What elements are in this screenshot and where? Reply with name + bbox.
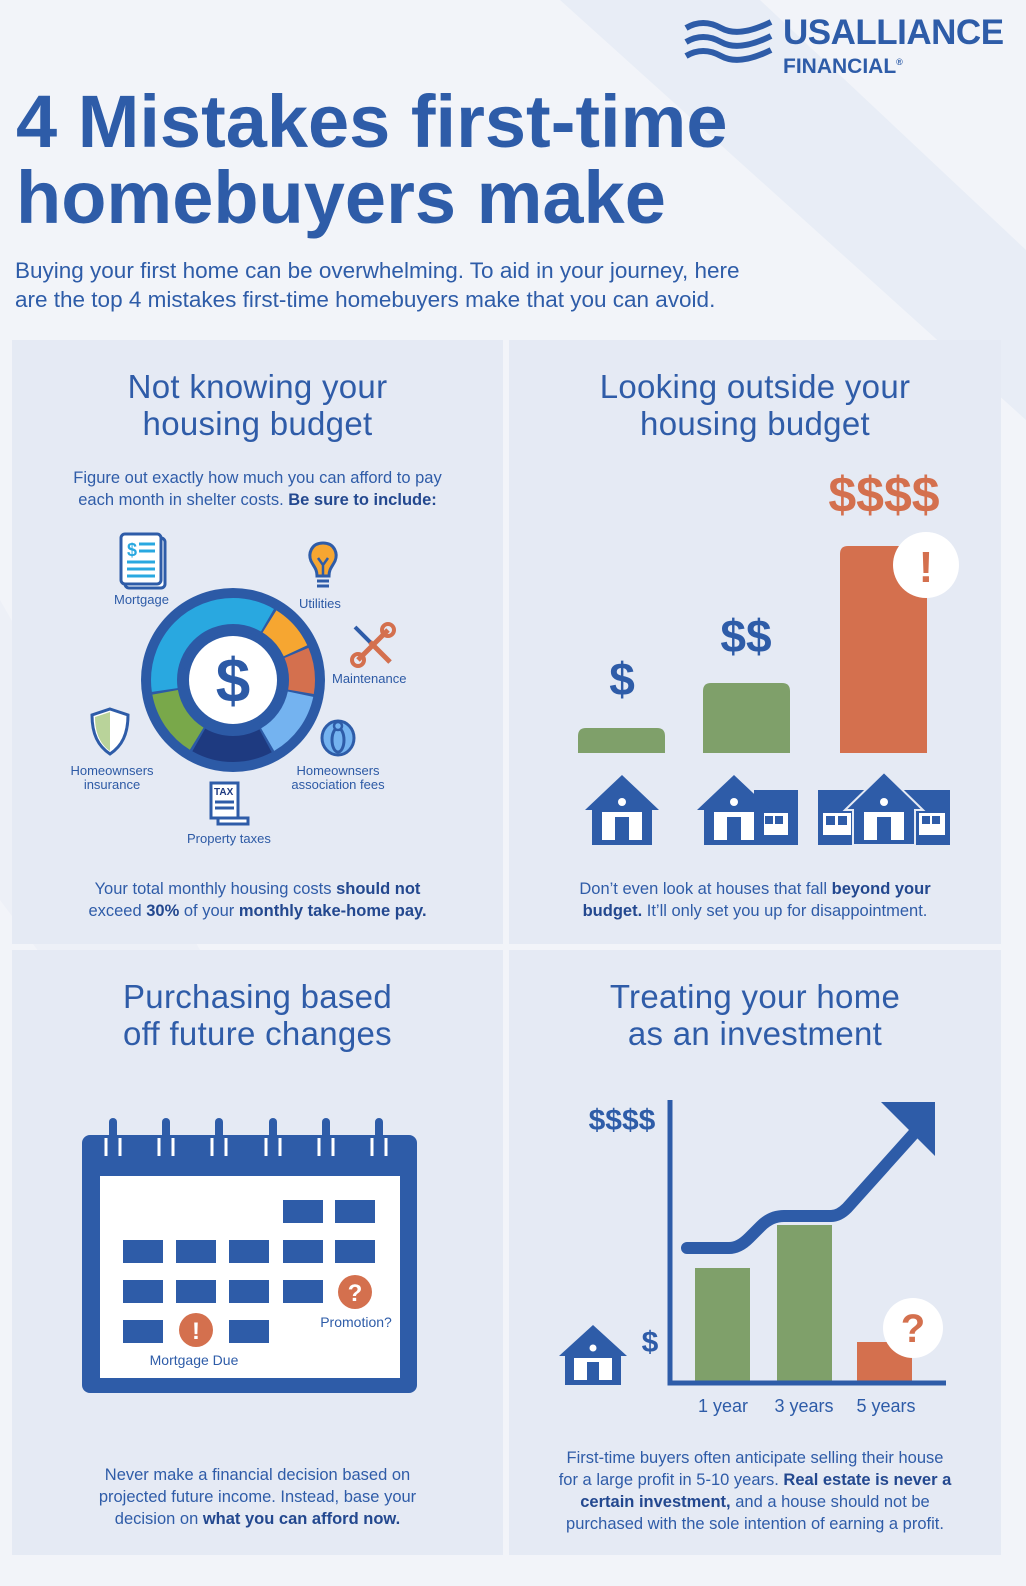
panel: housing budget [12,340,503,944]
panel: housing budget: Utilities [299,596,341,611]
logo: FINANCIAL® [783,55,903,78]
icon: mortgage: $ [127,540,137,560]
icon: house [559,1325,627,1385]
houses [585,772,950,845]
panel: housing budget: insurance [84,777,140,792]
heading 3: Purchasing based [123,978,392,1015]
intro 1: Figure out exactly how much you can afford to pay [73,469,442,487]
icon: HOA [320,720,356,756]
panel: housing budget: Homeownsers [296,763,380,778]
heading 1: housing budget [143,405,372,442]
bar chart: prices: $$ [720,610,772,662]
footer 4: certain investment, and a house should not be [580,1493,930,1511]
growth chart: 5 years [856,1396,916,1416]
icon: question: ? [901,1307,925,1351]
heading 3: off future changes [123,1015,392,1052]
footer 3 [99,1466,416,1528]
title: 4 Mistakes first-time [16,80,728,163]
intro text [15,258,740,312]
icon: tax: TAX [214,787,234,798]
panel: housing budget: association fees [291,777,385,792]
bar chart: prices [578,467,959,845]
heading 4: Treating your home [610,978,900,1015]
footer 4 [559,1449,952,1533]
intro 1: each month in shelter costs. Be sure to include: [78,491,437,509]
panel: housing budget: Maintenance [332,671,406,686]
title [16,80,728,239]
heading 2: Looking outside your [600,368,910,405]
footer 3: decision on what you can afford now. [115,1510,400,1528]
donut chart: $ [216,647,250,716]
icon: utilities [308,542,338,588]
footer 3: Never make a financial decision based on [105,1466,410,1484]
footer 1: Your total monthly housing costs should not [95,880,420,898]
panel: looking outside budget [509,340,1001,944]
panel: housing budget: Homeownsers [70,763,154,778]
growth chart: $$$$ [589,1104,656,1137]
intro text: Buying your first home can be overwhelming. To aid in your journey, here [15,258,740,283]
panel: housing budget: Property taxes [187,831,271,846]
growth chart: 1 year [698,1396,748,1416]
logo: USALLIANCE [783,13,1004,52]
calendar: ? [348,1280,362,1307]
calendar: Promotion? [320,1314,392,1330]
footer 2: budget. It’ll only set you up for disappointment. [583,902,927,920]
footer 4: purchased with the sole intention of earning a profit. [566,1515,944,1533]
calendar [82,1118,417,1393]
intro text: are the top 4 mistakes first-time homebuyers make that you can avoid. [15,287,715,312]
title: homebuyers make [16,156,666,239]
calendar: Mortgage Due [150,1352,239,1368]
growth chart [559,1100,946,1416]
donut chart [141,588,325,772]
footer 1: exceed 30% of your monthly take-home pay. [88,902,427,920]
bar chart: prices: $$$$ [828,467,940,523]
calendar: ! [192,1318,200,1345]
heading 2: housing budget [640,405,870,442]
panel: investment [509,950,1001,1555]
footer 2: Don’t even look at houses that fall beyond your [579,880,931,898]
icon: exclamation [893,532,959,598]
heading 2 [600,368,910,442]
footer 1 [88,880,427,920]
icon: maintenance [350,622,396,668]
footer 4: First-time buyers often anticipate selling their house [567,1449,943,1467]
growth chart: $ [642,1326,659,1359]
icon: exclamation: ! [919,543,933,592]
bar chart: prices: $ [609,653,635,705]
heading 4: as an investment [628,1015,882,1052]
footer 2 [579,880,931,920]
heading 4 [610,978,900,1052]
icon: tax [210,782,250,826]
panel: future changes [12,950,503,1555]
panel: housing budget: Mortgage [114,592,169,607]
footer 3: projected future income. Instead, base your [99,1488,416,1506]
growth chart: 3 years [774,1396,834,1416]
heading 3 [123,978,392,1052]
heading 1: Not knowing your [128,368,387,405]
icon: insurance [90,707,130,756]
icon: question [883,1298,943,1358]
heading 1 [128,368,387,442]
intro 1 [73,469,442,509]
icon: mortgage [120,532,166,590]
footer 4: for a large profit in 5-10 years. Real estate is never a [559,1471,951,1489]
logo [684,13,1004,78]
